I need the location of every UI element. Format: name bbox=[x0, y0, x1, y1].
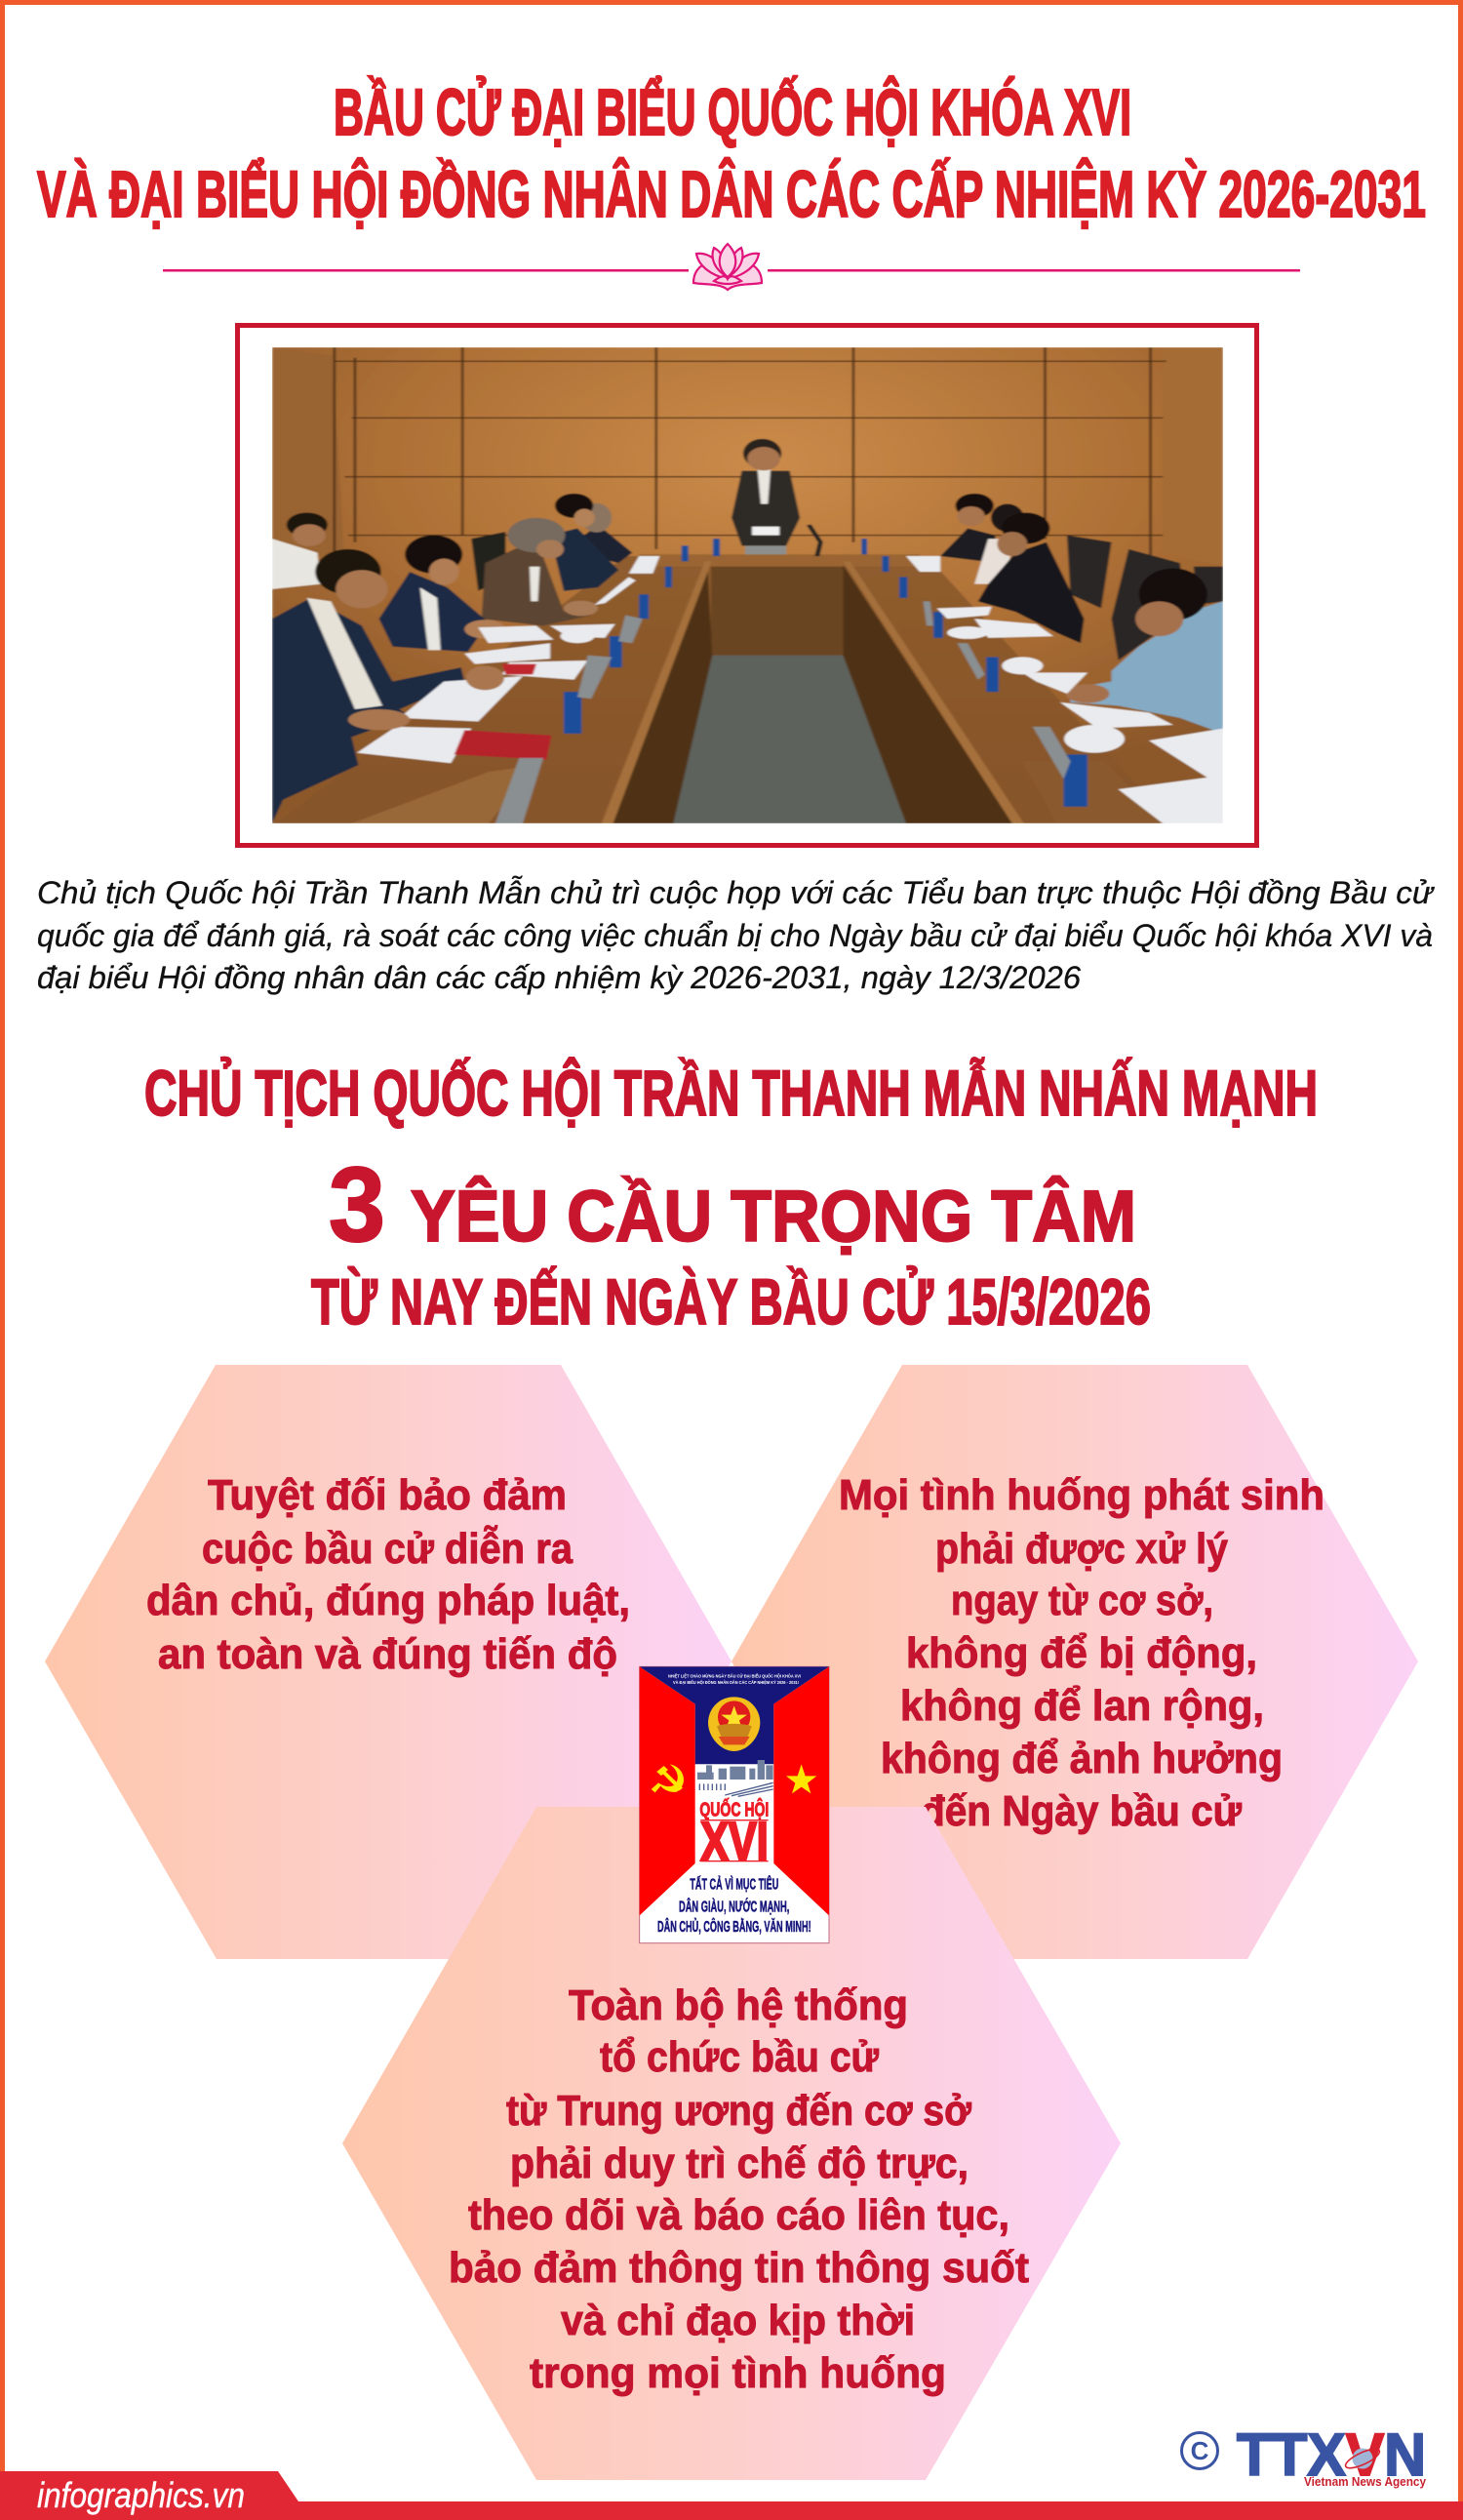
hexagon 3: trong mọi tình huống bbox=[530, 2349, 946, 2397]
election poster: NHIỆT LIỆT CHÀO MỪNG NGÀY BẦU CỬ ĐẠI BIỂU QUỐC HỘI KHÓA XVI bbox=[668, 1671, 801, 1678]
hexagon 1: dân chủ, đúng pháp luật, bbox=[146, 1577, 630, 1624]
right side people bbox=[1067, 536, 1112, 609]
photo: meeting at long table bbox=[272, 347, 1223, 823]
hexagon 2: phải được xử lý bbox=[935, 1525, 1228, 1573]
election poster: DÂN CHỦ, CÔNG BẰNG, VĂN MINH! bbox=[657, 1917, 811, 1936]
section heading: TỪ NAY ĐẾN NGÀY BẦU CỬ 15/3/2026 bbox=[311, 1265, 1151, 1338]
papers right bbox=[561, 556, 1223, 823]
photo frame bbox=[238, 326, 1256, 845]
hexagon 3: từ Trung ương đến cơ sở bbox=[506, 2087, 972, 2135]
hexagon 2: đến Ngày bầu cử bbox=[921, 1787, 1242, 1835]
election poster bbox=[640, 1666, 829, 1943]
election poster: XVI bbox=[700, 1810, 769, 1871]
election poster: TẤT CẢ VÌ MỤC TIÊU bbox=[690, 1875, 778, 1894]
TTXVN logo: C bbox=[1191, 2436, 1209, 2465]
lotus divider bbox=[163, 244, 1300, 290]
title bbox=[37, 75, 1426, 231]
footer band bbox=[0, 2471, 1463, 2520]
election poster: QUỐC HỘI bbox=[699, 1798, 769, 1821]
left side people bbox=[471, 532, 505, 591]
bottles and microphone bases bbox=[564, 539, 1087, 807]
hexagon 2: không để ảnh hưởng bbox=[881, 1735, 1283, 1782]
hexagon 2: không để bị động, bbox=[906, 1629, 1257, 1677]
photo caption: quốc gia để đánh giá, rà soát các công việc chuẩn bị cho Ngày bầu cử đại biểu Quốc hội khóa XVI và bbox=[37, 918, 1433, 953]
TTXVN logo: Vietnam News Agency bbox=[1304, 2474, 1427, 2489]
election poster: VÀ ĐẠI BIỂU HỘI ĐỒNG NHÂN DÂN CÁC CẤP NHIỆM KỲ 2026 - 2031! bbox=[673, 1678, 799, 1685]
section heading: 3 bbox=[329, 1145, 385, 1264]
hexagon 3 bbox=[342, 1807, 1121, 2480]
hexagon 2 bbox=[732, 1365, 1418, 1959]
hexagon 2: không để lan rộng, bbox=[900, 1682, 1264, 1730]
chairman bbox=[745, 545, 786, 554]
hexagon 2: ngay từ cơ sở, bbox=[951, 1577, 1213, 1624]
photo caption bbox=[37, 875, 1436, 995]
hexagon 3: tổ chức bầu cử bbox=[600, 2033, 879, 2081]
hexagon 1: Tuyệt đối bảo đảm bbox=[208, 1471, 567, 1519]
hexagon 3: phải duy trì chế độ trực, bbox=[510, 2140, 969, 2187]
footer band: infographics.vn bbox=[37, 2475, 245, 2515]
hexagon 3: theo dõi và báo cáo liên tục, bbox=[468, 2191, 1009, 2239]
papers left bbox=[357, 556, 659, 763]
section heading bbox=[144, 1057, 1318, 1338]
TTXVN logo: TTXVN bbox=[1237, 2421, 1426, 2488]
table bbox=[272, 556, 1173, 823]
hexagon 2: Mọi tình huống phát sinh bbox=[839, 1471, 1325, 1519]
hexagon 3: Toàn bộ hệ thống bbox=[569, 1981, 908, 2029]
hexagon 3: và chỉ đạo kịp thời bbox=[561, 2297, 915, 2344]
hexagon 1 bbox=[45, 1365, 732, 1959]
section heading: YÊU CẦU TRỌNG TÂM bbox=[411, 1176, 1136, 1257]
election poster: DÂN GIÀU, NƯỚC MẠNH, bbox=[679, 1897, 789, 1915]
hexagon 1: an toàn và đúng tiến độ bbox=[158, 1630, 617, 1678]
hexagon 3: bảo đảm thông tin thông suốt bbox=[449, 2244, 1029, 2292]
photo caption: Chủ tịch Quốc hội Trần Thanh Mẫn chủ trì cuộc họp với các Tiểu ban trực thuộc Hội đồng Bầu cử bbox=[37, 875, 1436, 910]
photo caption: đại biểu Hội đồng nhân dân các cấp nhiệm kỳ 2026-2031, ngày 12/3/2026 bbox=[37, 960, 1081, 995]
hexagon 1: cuộc bầu cử diễn ra bbox=[202, 1524, 573, 1573]
